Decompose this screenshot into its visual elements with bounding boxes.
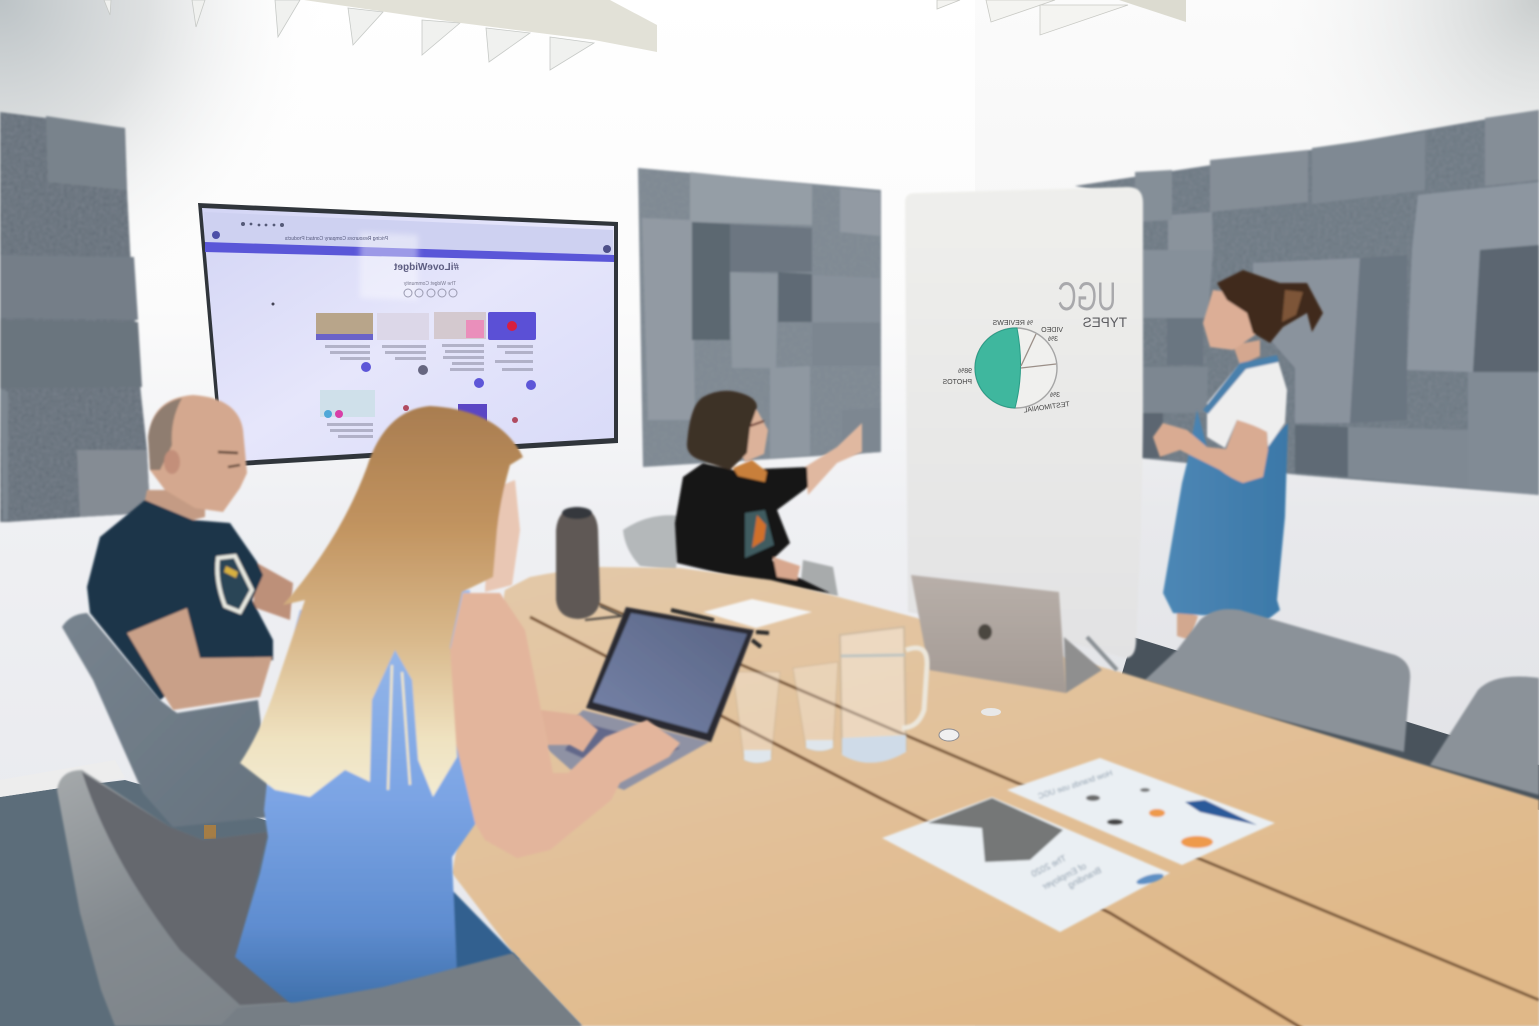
table seam: rear xyxy=(590,600,1539,1000)
orange shapes xyxy=(1149,809,1165,817)
wall: left xyxy=(0,0,978,1026)
chair: right 2 xyxy=(1430,676,1539,795)
document: left xyxy=(882,797,1170,932)
person: blonde woman xyxy=(235,406,680,1010)
board surface xyxy=(905,187,1143,658)
far arm xyxy=(253,563,293,620)
head xyxy=(148,395,247,512)
baffle fins xyxy=(937,0,1128,35)
chair leg xyxy=(204,825,216,839)
tv header strip xyxy=(204,212,613,255)
pie label: testimonial percent: 3% xyxy=(1050,392,1060,399)
hair stubble xyxy=(148,398,182,470)
tv screen xyxy=(202,208,614,462)
sheet xyxy=(882,797,1170,932)
wall: right xyxy=(975,0,1539,1026)
baffle fins xyxy=(104,0,594,70)
pie label: testimonial: TESTIMONIAL xyxy=(1023,401,1070,414)
laptop: black xyxy=(545,607,754,790)
arm xyxy=(805,423,862,495)
cover text line 1: The 2020 xyxy=(1029,853,1068,879)
television xyxy=(198,203,618,467)
tv avatars xyxy=(361,362,536,390)
ceiling baffles: left xyxy=(104,0,657,70)
table top xyxy=(452,567,1539,1026)
tv purple bar xyxy=(205,242,614,262)
hand on lap xyxy=(773,557,800,580)
ear xyxy=(164,450,180,474)
felt panel: right wall xyxy=(1075,110,1539,495)
chair: left xyxy=(62,613,272,827)
near arm xyxy=(127,608,272,710)
hair xyxy=(687,391,757,470)
pie outline xyxy=(975,328,1057,408)
t-shirt xyxy=(1207,357,1287,448)
headline: How brands use UGC xyxy=(1037,768,1114,801)
badges xyxy=(939,708,1001,741)
water jug xyxy=(840,627,927,763)
pie chart: UGC types xyxy=(975,328,1057,408)
chair seat inner xyxy=(82,772,298,1005)
floor: right xyxy=(1120,637,1539,810)
jug body xyxy=(840,627,906,762)
wall: top-right shade xyxy=(1230,0,1539,300)
jug water line xyxy=(841,655,905,656)
cover text line 2: of Employer xyxy=(1041,861,1088,892)
tv frame xyxy=(198,203,618,467)
straps xyxy=(1203,355,1279,414)
glass: middle xyxy=(793,662,838,751)
face xyxy=(735,410,768,462)
pen xyxy=(671,610,769,647)
glass body xyxy=(733,672,780,763)
heading: UGC: UGC xyxy=(1058,274,1116,319)
paper sheet and pen xyxy=(671,599,812,647)
lid xyxy=(911,575,1066,693)
speaker top xyxy=(562,507,592,519)
bun highlight xyxy=(1282,290,1303,322)
table seam: front xyxy=(530,617,1305,1026)
scarf lower xyxy=(745,510,774,558)
brow and eye xyxy=(218,452,240,467)
tv glare xyxy=(360,232,418,300)
person: man seated xyxy=(62,395,293,839)
logo bar xyxy=(224,566,238,578)
laptop: grey xyxy=(911,575,1117,693)
heading: TYPES: TYPES xyxy=(1083,315,1127,330)
glass base xyxy=(744,750,771,763)
man body xyxy=(87,395,293,710)
baffle band xyxy=(1119,0,1186,22)
whiteboard xyxy=(905,187,1143,658)
sweater xyxy=(675,463,830,593)
tv subheading: The Widget Community xyxy=(403,281,456,287)
ceiling baffles: right xyxy=(937,0,1186,35)
speaker xyxy=(556,507,622,620)
pie label: photos percent: 98% xyxy=(958,368,972,375)
arm xyxy=(450,593,680,858)
tv nav text: Pricing Resources Company Contact Products xyxy=(284,236,388,242)
glasses xyxy=(750,421,764,426)
chair: center xyxy=(623,515,838,596)
table xyxy=(452,567,1539,1026)
keyboard xyxy=(565,722,680,775)
screen xyxy=(593,613,747,733)
baseboard: left xyxy=(0,760,125,797)
chair: front rim xyxy=(220,953,582,1026)
arm xyxy=(1153,420,1268,483)
whiteboard stand xyxy=(1087,637,1117,670)
chair shell xyxy=(57,770,582,1026)
pie label: photos: PHOTOS xyxy=(942,379,972,386)
floor: left xyxy=(0,780,300,1026)
base xyxy=(1064,637,1102,693)
pie label: reviews: % REVIEWS xyxy=(992,320,1033,327)
small figures xyxy=(1086,795,1100,801)
shirt logo xyxy=(217,556,252,612)
tv card text xyxy=(325,344,533,438)
hair xyxy=(1217,270,1323,343)
felt panel: left wall xyxy=(0,112,150,522)
dark legs xyxy=(440,890,520,985)
glass body xyxy=(793,662,838,751)
pie slice: photos xyxy=(975,328,1021,408)
chair: right 1 xyxy=(1145,609,1410,752)
person: standing woman xyxy=(1153,270,1323,640)
sheet xyxy=(1007,758,1275,865)
hand left xyxy=(541,710,598,752)
t-shirt xyxy=(87,500,273,700)
chair: front xyxy=(57,770,582,1026)
pie dividers xyxy=(1021,334,1056,368)
tv heading: #iLoveWidget xyxy=(393,262,459,273)
tv toolbar dots xyxy=(212,222,611,253)
paper xyxy=(703,599,812,628)
pie label: video: VIDEO xyxy=(1041,327,1063,334)
dress xyxy=(235,590,478,1010)
lid xyxy=(586,607,754,742)
neck xyxy=(1233,340,1260,365)
glass base xyxy=(806,740,833,751)
tv share icons xyxy=(404,289,457,297)
face xyxy=(485,480,520,592)
cover photo xyxy=(928,798,1063,862)
document: right xyxy=(1007,758,1275,865)
felt panel: center xyxy=(638,168,881,467)
speaker body xyxy=(556,507,600,619)
hair strands xyxy=(388,665,410,790)
dress xyxy=(1163,410,1288,620)
face xyxy=(1203,290,1255,350)
keyboard base xyxy=(545,710,709,790)
neck xyxy=(145,490,205,520)
glass: left xyxy=(733,672,780,763)
pie label: video percent: 3% xyxy=(1048,336,1058,343)
figure: person xyxy=(1185,800,1257,825)
tv card images xyxy=(316,312,536,422)
logo xyxy=(1135,872,1165,886)
jug base xyxy=(842,735,906,763)
scarf top xyxy=(733,460,767,482)
hair xyxy=(240,406,523,797)
tv lower icons xyxy=(272,302,518,423)
wall: top-left shade xyxy=(0,0,340,340)
leg xyxy=(1177,610,1198,640)
baffle band xyxy=(304,0,657,52)
person: woman pointing xyxy=(675,391,862,593)
cover text line 3: Branding xyxy=(1066,865,1103,890)
logo xyxy=(978,624,992,640)
speaker cable xyxy=(585,606,622,620)
jug handle xyxy=(902,648,927,728)
